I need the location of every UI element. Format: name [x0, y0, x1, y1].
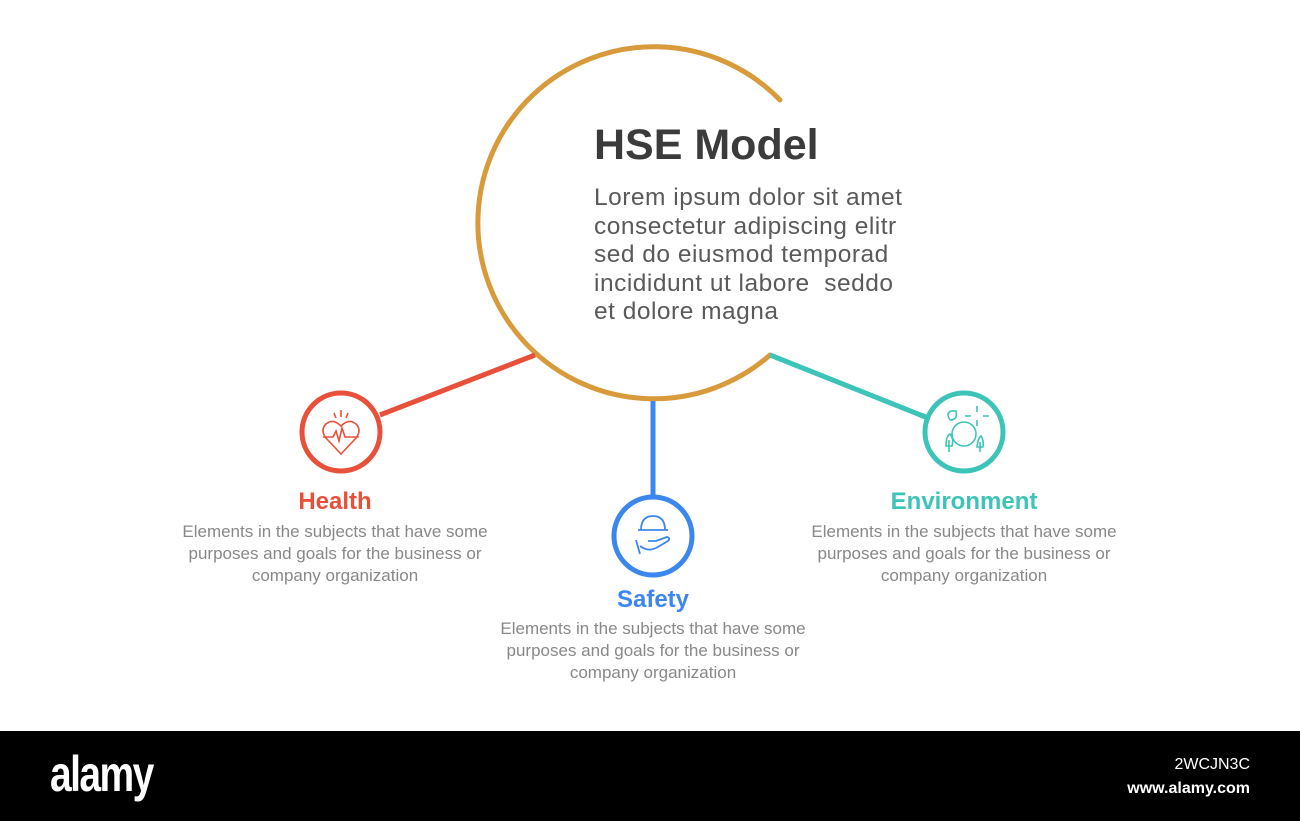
desc: environment: company organization: [881, 566, 1047, 585]
label: environment: Environment: [891, 488, 1037, 515]
icon: safety helmet hand: [614, 497, 692, 575]
desc: health: company organization: [252, 566, 418, 585]
desc: safety: [500, 619, 806, 682]
connector: health: [380, 355, 535, 415]
footer logo: alamy: [50, 746, 153, 802]
main text block: sed do eiusmod temporad: [594, 241, 889, 268]
desc: safety: purposes and goals for the business or: [507, 641, 799, 660]
desc: environment: [811, 522, 1117, 585]
main text block: [594, 184, 902, 325]
icon: health heart: [302, 393, 380, 471]
desc: environment: Elements in the subjects that have some: [811, 522, 1117, 541]
label: health: Health: [298, 488, 372, 515]
footer code: www.alamy.com: [1127, 780, 1250, 797]
main ring arc: [478, 47, 780, 399]
connector: safety: [650, 401, 656, 497]
main text block: incididunt ut labore seddo: [594, 270, 894, 296]
footer code: 2WCJN3C: [1174, 756, 1250, 773]
desc: health: Elements in the subjects that have some: [182, 522, 488, 541]
connector: environment: [770, 355, 928, 418]
main text block: et dolore magna: [594, 298, 779, 325]
desc: safety: Elements in the subjects that have some: [500, 619, 806, 638]
desc: health: purposes and goals for the business or: [189, 544, 481, 563]
desc: health: [182, 522, 488, 585]
footer bar: [0, 731, 1300, 821]
desc: safety: company organization: [570, 663, 736, 682]
main text block: Lorem ipsum dolor sit amet: [594, 184, 902, 211]
label: safety: Safety: [617, 586, 689, 613]
title: HSE Model: [594, 121, 819, 169]
footer code: [1127, 756, 1250, 797]
icon: environment globe: [925, 393, 1003, 471]
desc: environment: purposes and goals for the business or: [818, 544, 1110, 563]
main text block: consectetur adipiscing elitr: [594, 212, 897, 240]
